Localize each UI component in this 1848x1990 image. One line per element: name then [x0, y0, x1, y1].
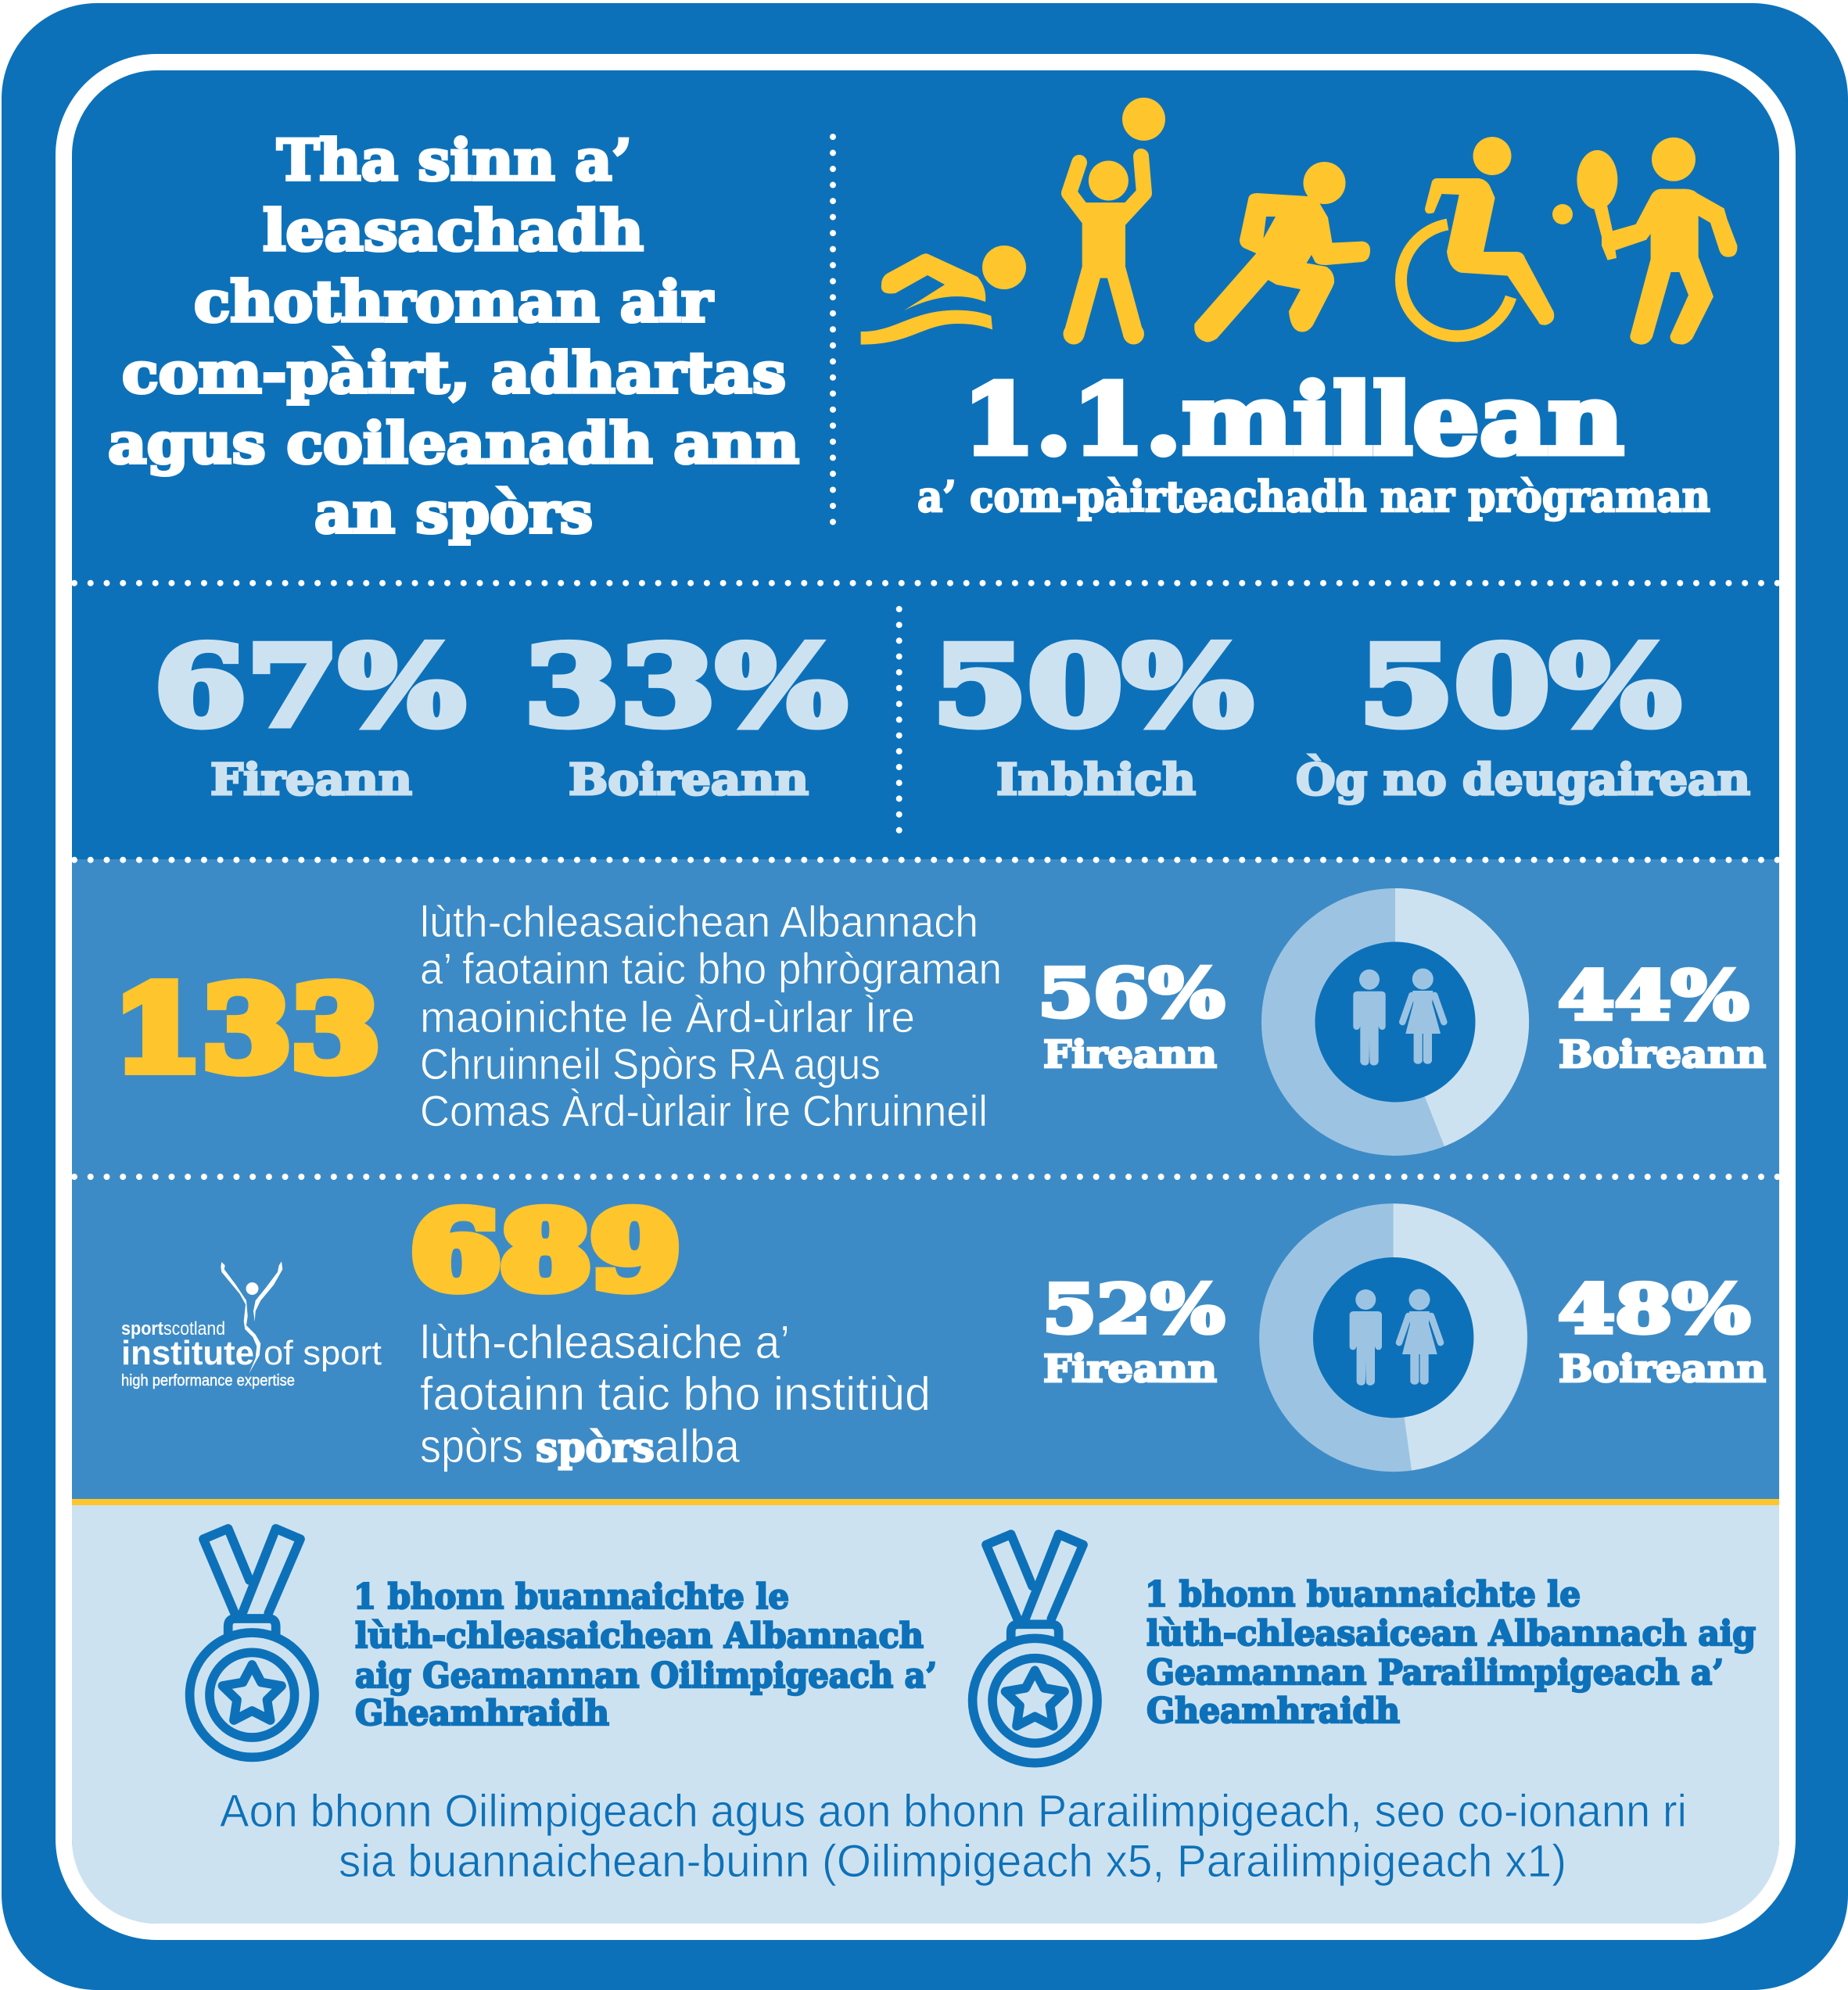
text block: Paralympic medal: Gheamhraidh [1146, 1691, 1400, 1731]
heading: main statement: Tha sinn a’ [277, 127, 632, 193]
heading: main statement: an spòrs [314, 479, 593, 546]
stat: 48% female: 48% [1558, 1271, 1750, 1349]
text block: Olympic medal [353, 1577, 937, 1734]
heading: main statement: com-pàirt, adhartas [122, 339, 786, 406]
logo: sportscotland institute of sport: institute [121, 1334, 254, 1372]
text block: 133 description: lùth-chleasaichean Albannach [420, 897, 978, 946]
text block: 689 description [420, 1316, 931, 1472]
text block: 689 description: alba [655, 1420, 741, 1472]
logo: sportscotland institute of sport: of sport [264, 1334, 382, 1372]
stat: 52% male: 52% [1042, 1271, 1225, 1349]
icon: Paralympic medal [973, 1534, 1097, 1763]
stat: 56% male [1038, 955, 1225, 1077]
stat: 48% female [1558, 1271, 1766, 1391]
stat: 48% female: Boireann [1559, 1347, 1766, 1391]
text block: Paralympic medal [1145, 1575, 1756, 1731]
logo figure [221, 1261, 282, 1374]
mid blue band: athlete rows [72, 859, 1779, 1499]
text block: 133 description [420, 897, 1002, 1135]
stat: 52% male: Fireann [1043, 1347, 1217, 1391]
text block: 133 description: Chruinneil Spòrs RA agus [420, 1039, 881, 1088]
text block: 689 description: spòrs [420, 1420, 523, 1472]
stat: 52% male [1042, 1271, 1225, 1391]
text block: medal summary: Aon bhonn Oilimpigeach agus aon bhonn Parailimpigeach, seo co-ionann ri [220, 1786, 1687, 1837]
stat: 689 athletes: 689 [411, 1189, 680, 1313]
text block: Olympic medal: Gheamhraidh [355, 1694, 609, 1734]
stat: 50% adults: 50% [932, 622, 1253, 751]
logo: sportscotland institute of sport: sport [121, 1318, 163, 1339]
icon: Olympic medal [190, 1529, 314, 1757]
statistic: participants [917, 364, 1710, 522]
statistic: participants: a’ com-pàirteachadh nar prògraman [917, 472, 1710, 522]
text block: Olympic medal: aig Geamannan Oilimpigeach a’ [355, 1656, 937, 1696]
text block: 133 description: Comas Àrd-ùrlair Ìre Chruinneil [420, 1086, 988, 1135]
stat: 67% male: 67% [154, 622, 465, 751]
stat: 50% adults: Inbhich [996, 754, 1196, 805]
icon: tennis player [1552, 138, 1737, 345]
yellow rule [72, 1499, 1779, 1505]
text block: medal summary: sia buannaichean-buinn (Oilimpigeach x5, Parailimpigeach x1) [339, 1836, 1566, 1887]
logo: sportscotland institute of sport: scotland [163, 1318, 225, 1339]
statistic: participants: 1.1.millean [962, 364, 1624, 477]
stat: 56% male: Fireann [1043, 1033, 1217, 1077]
icon: woman [1402, 968, 1444, 1064]
stat: 44% female: Boireann [1559, 1033, 1766, 1077]
text block: Olympic medal: 1 bhonn buannaichte le [353, 1577, 789, 1617]
text block: 689 description: faotainn taic bho institiùd [420, 1368, 931, 1420]
stat: 50% adults [932, 622, 1253, 805]
heading: main statement [108, 127, 799, 546]
heading: main statement: agus coileanadh ann [108, 410, 799, 476]
stat: 50% young people: Òg no deugairean [1296, 754, 1750, 805]
icon: man [1350, 1289, 1382, 1386]
icons: sports figures [861, 98, 1737, 345]
stat: 33% female [524, 622, 847, 805]
stat: 67% male [154, 622, 465, 805]
heading: main statement: chothroman air [194, 268, 713, 335]
text block: 133 description: a’ faotainn taic bho phrògraman [420, 944, 1002, 993]
icon: woman [1399, 1289, 1441, 1385]
donut chart: 56% / 44% [1261, 888, 1529, 1156]
text block: Paralympic medal: lùth-chleasaicean Albannach aig [1146, 1614, 1756, 1654]
icon: swimmer [861, 246, 1026, 345]
icon: runner [1194, 162, 1370, 342]
stat: 50% young people [1296, 622, 1750, 805]
text block: 133 description: maoinichte le Àrd-ùrlar Ìre [420, 992, 915, 1042]
logo: sportscotland institute of sport [121, 1261, 382, 1389]
text block: 689 description: lùth-chleasaiche a’ [420, 1316, 790, 1368]
stat: 33% female: 33% [524, 622, 847, 751]
panel: medals [72, 1505, 1779, 1924]
stat: 50% young people: 50% [1358, 622, 1681, 751]
heading: main statement: leasachadh [263, 197, 644, 264]
text block: Olympic medal: lùth-chleasaichean Albannach [355, 1616, 924, 1656]
stat: 33% female: Boireann [569, 754, 809, 805]
icon: wheelchair athlete [1401, 137, 1554, 336]
text block: 689 description: spòrs [536, 1425, 655, 1472]
stat: 67% male: Fireann [210, 754, 412, 805]
text block: medal summary [220, 1786, 1687, 1887]
stat: 44% female: 44% [1558, 957, 1749, 1035]
stat: 133 athletes: 133 [113, 961, 380, 1097]
icon: man [1353, 970, 1386, 1065]
stat: 56% male: 56% [1038, 955, 1225, 1033]
icon: volleyball player [1064, 98, 1165, 344]
text block: Paralympic medal: 1 bhonn buannaichte le [1145, 1575, 1581, 1615]
stat: 44% female [1558, 957, 1766, 1077]
donut chart: 52% / 48% [1259, 1203, 1527, 1472]
text block: Paralympic medal: Geamannan Parailimpigeach a’ [1146, 1653, 1724, 1693]
logo: sportscotland institute of sport: high performance expertise [121, 1372, 295, 1389]
